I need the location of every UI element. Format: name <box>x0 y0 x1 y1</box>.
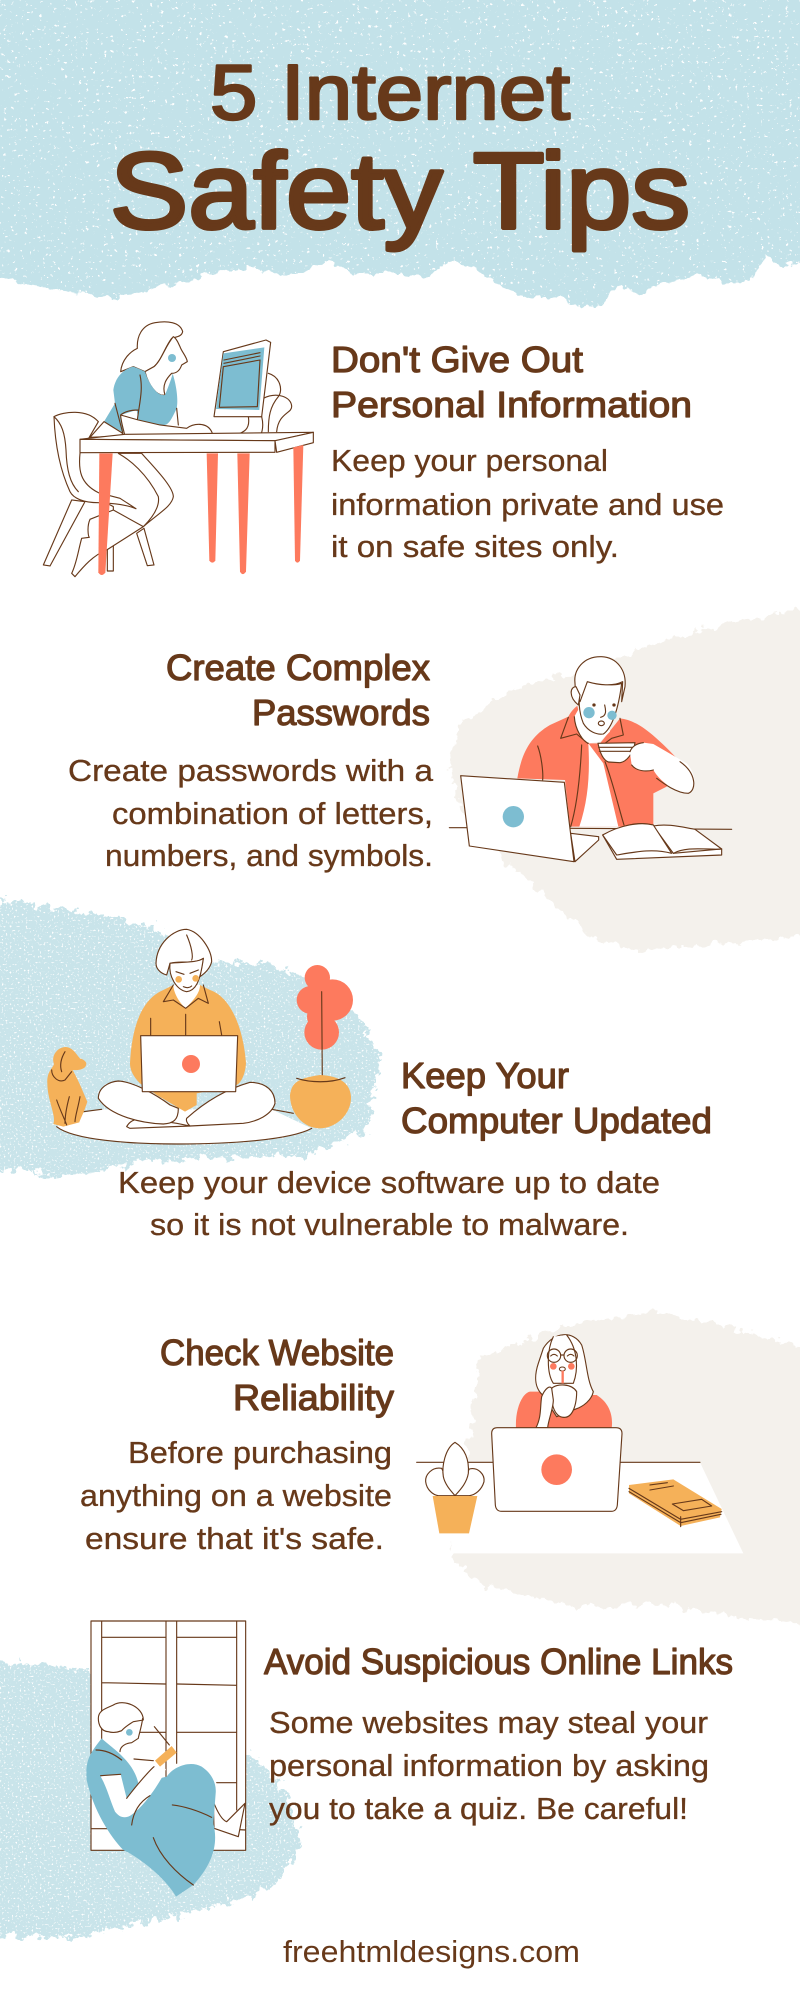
heading: tip 1 <box>331 339 692 425</box>
text: tip 1 body: it on safe sites only. <box>331 529 619 564</box>
panel: tip 1 personal information <box>43 322 724 577</box>
text: tip 2 body <box>68 753 434 873</box>
text: tip 4 body <box>80 1435 392 1556</box>
text: tip 3 body: Keep your device software up to date <box>118 1165 660 1200</box>
title: 5 Internet <box>210 48 570 136</box>
heading: tip 3: Computer Updated <box>401 1100 712 1141</box>
heading: tip 4: Reliability <box>233 1377 394 1418</box>
heading: tip 1: Don't Give Out <box>331 339 583 380</box>
text: tip 1 body: Keep your personal <box>331 443 608 478</box>
heading: tip 2: Passwords <box>252 692 430 733</box>
background: blue blob behind tip 5 <box>0 1661 301 1938</box>
heading: tip 4 <box>160 1332 394 1418</box>
title <box>110 48 690 251</box>
text: tip 4 body: anything on a website <box>80 1478 392 1513</box>
background: beige blob behind tip 2 <box>449 608 800 950</box>
text: tip 3 body: so it is not vulnerable to malware. <box>150 1207 629 1242</box>
heading: tip 4: Check Website <box>160 1332 394 1373</box>
text: tip 4 body: Before purchasing <box>128 1435 392 1470</box>
panel: tip 3 computer updated <box>47 929 712 1242</box>
panel: tip 2 passwords <box>68 647 732 873</box>
panel: tip 4 website reliability <box>80 1332 743 1556</box>
text: tip 5 body <box>269 1705 709 1826</box>
illustration: woman at desk with monitor <box>43 322 313 577</box>
heading: tip 1: Personal Information <box>331 384 692 425</box>
background: blue torn banner <box>0 0 800 308</box>
text: tip 3 body <box>118 1165 660 1242</box>
title: Safety Tips <box>110 130 690 251</box>
background: beige blob behind tip 4 <box>449 1312 800 1625</box>
text: tip 5 body: personal information by asking <box>269 1748 709 1783</box>
heading: tip 5: Avoid Suspicious Online Links <box>264 1641 733 1682</box>
text: tip 2 body: Create passwords with a <box>68 753 434 788</box>
text: tip 5 body: you to take a quiz. Be careful! <box>269 1791 688 1826</box>
heading: tip 3: Keep Your <box>401 1055 569 1096</box>
illustration: woman with drink behind laptop <box>417 1335 743 1553</box>
footer website: freehtmldesigns.com <box>283 1934 580 1969</box>
text: tip 1 body <box>331 443 724 564</box>
text: tip 4 body: ensure that it's safe. <box>85 1521 384 1556</box>
background: blue blob behind tip 3 <box>0 898 380 1176</box>
text: tip 2 body: combination of letters, <box>112 796 433 831</box>
text: tip 2 body: numbers, and symbols. <box>105 838 433 873</box>
text: tip 1 body: information private and use <box>331 487 724 522</box>
text: tip 5 body: Some websites may steal your <box>269 1705 708 1740</box>
heading: tip 3 <box>401 1055 712 1141</box>
illustration: woman on phone at window <box>86 1621 246 1897</box>
heading: tip 2 <box>166 647 430 733</box>
panel: tip 5 suspicious links <box>86 1621 733 1897</box>
heading: tip 2: Create Complex <box>166 647 430 688</box>
illustration: person with laptop, dog and plant <box>47 929 353 1144</box>
illustration: man with coffee and laptop <box>449 657 732 862</box>
